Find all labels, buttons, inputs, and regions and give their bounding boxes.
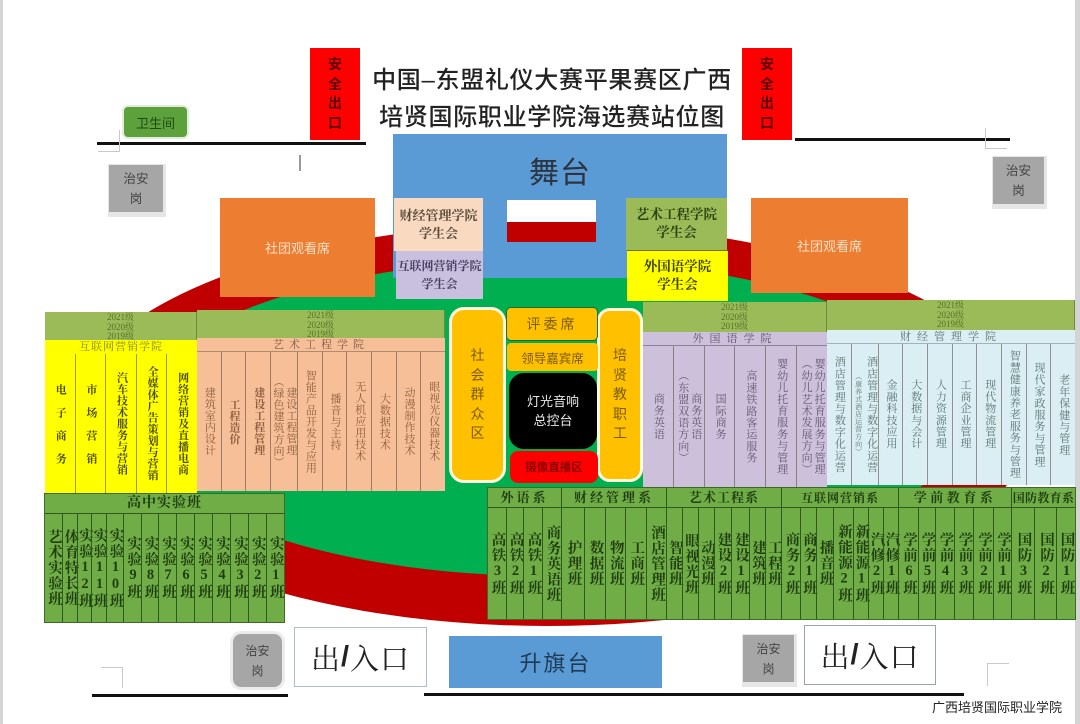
majors internet college: 市场营销 [85,384,97,476]
majors finance college: 人力资源管理 [934,379,946,450]
community audience area: 会 [470,367,484,383]
safety exit left [310,48,360,140]
finance management department: 护理班 [566,540,582,587]
year band art college: 2021级 [307,310,334,320]
safety exit right: 安 [760,56,774,72]
foreign language department: 高铁1班 [526,532,542,595]
preschool education department: 学前教育系 [914,490,996,505]
national defense education department: 国防1班 [1058,532,1074,595]
majors finance college: 酒店管理与数字化运营 [866,356,878,473]
majors finance college: 酒店管理与数字化运营 [833,356,845,473]
majors foreign language college [643,346,827,487]
leaders and guests seats: 领导嘉宾席 [521,352,584,366]
safety exit left: 口 [328,114,342,130]
majors art college: 播音与主持 [329,393,341,450]
security post top left: 岗 [130,192,142,206]
security post top right: 治安 [1006,164,1031,178]
year band foreign language college [643,302,827,332]
community audience area: 群 [470,386,484,402]
year band art college: 2020级 [307,320,334,330]
header foreign language college [643,332,827,346]
top left wall line [97,142,366,145]
class columns high school: 实验9班 [125,536,141,600]
internet marketing department: 汽修2班 [868,532,884,595]
community audience area: 区 [470,425,484,441]
year band foreign language college: 2021级 [721,302,748,312]
internet marketing department: 新能源1班 [854,524,870,603]
national defense education department: 国防3班 [1016,532,1032,595]
majors finance college: 大数据与会计 [910,379,922,450]
safety exit right [742,48,792,140]
club seating left: 社团观看席 [265,241,330,256]
year band finance college [827,300,1075,330]
majors foreign language college: （东盟双语方向） [677,370,689,463]
flag raising platform: 升旗台 [519,651,592,676]
camera and broadcast area [510,451,598,483]
class columns high school: 实验2班 [250,536,266,600]
preschool education department: 学前1班 [995,532,1011,595]
majors finance college: 工商企业管理 [959,379,971,450]
class columns high school: 实验5班 [196,536,212,600]
majors internet college: 全媒体广告策划与营销 [146,366,158,481]
staff area: 培 [613,347,627,363]
majors art college: 建设工程管理 [285,387,297,456]
finance management department: 物流班 [608,540,624,587]
class columns high school: 实验11班 [92,528,108,608]
security post bottom right: 治安 [756,642,780,656]
foreign language department: 外语系 [500,490,548,505]
safety exit left: 全 [328,76,342,92]
safety exit right: 口 [760,114,774,130]
heading high school classes: 高中实验班 [127,496,202,511]
class columns high school: 实验1班 [268,536,284,600]
majors art college: 建设工程管理 [253,387,265,456]
class columns high school: 实验6班 [178,536,194,600]
title [372,67,732,131]
entrance and exit right: / [850,638,860,670]
flag backdrop [507,200,596,242]
art engineering department: 艺术工程系 [689,490,759,505]
preschool education department [898,488,1011,619]
staff area [597,308,643,482]
student union art: 艺术工程学院 [636,207,717,222]
foreign language department: 高铁3班 [490,532,506,595]
majors internet college: 电子商务 [54,384,66,476]
majors finance college: 现代家政服务与管理 [1033,362,1045,467]
student union internet: 学生会 [421,277,458,291]
judges seats [506,307,598,341]
class columns high school: 艺术实验班 [46,529,62,607]
finance management department: 工商班 [628,540,644,587]
class columns high school: 体育特长班 [62,529,78,607]
majors internet college [45,354,197,493]
lighting and sound control [509,373,597,449]
community audience area [449,307,506,483]
student union foreign languages: 学生会 [657,277,698,292]
finance management department: 财经管理系 [574,490,654,505]
year band internet college [45,312,197,340]
majors internet college: 网络营销及直播电商 [177,372,189,475]
year band internet college: 2020级 [107,322,134,332]
student union internet: 互联网营销学院 [397,259,482,273]
security post bottom left: 岗 [251,664,264,678]
header finance college: 财经管理学院 [900,331,1002,343]
art engineering department [666,488,781,619]
class columns high school: 实验3班 [232,536,248,600]
year band art college: 2019级 [307,329,334,339]
finance management department: 酒店管理班 [649,525,665,602]
student union foreign languages [627,250,728,301]
majors art college: （绿色建筑方向） [272,376,284,468]
year band foreign language college: 2019级 [721,321,748,331]
majors finance college: 智慧健康养老服务与管理 [1008,350,1020,479]
student union art: 学生会 [656,225,697,240]
foreign language department: 高铁2班 [508,532,524,595]
class columns high school: 实验10班 [108,528,124,608]
preschool education department: 学前3班 [956,532,972,595]
entrance and exit left [294,627,427,687]
staff area: 贤 [613,367,627,383]
security post top left [108,164,166,217]
top right wall line [795,138,1010,141]
club seating left [220,198,375,297]
majors art college: 智能产品开发与应用 [304,370,316,473]
majors art college: 工程造价 [228,398,240,444]
year band foreign language college: 2020级 [721,312,748,322]
title: 中国–东盟礼仪大赛平果赛区广西 [372,67,732,94]
safety exit right: 出 [760,95,774,111]
header internet college [45,340,197,354]
art engineering department: 建设1班 [733,532,749,595]
security post bottom left [230,631,285,690]
foreign language department [488,490,561,619]
art engineering department: 智能班 [667,540,683,587]
entrance and exit right: 出 入口 [820,642,920,674]
class columns high school: 实验7班 [160,536,176,600]
year band internet college: 2021级 [107,312,134,322]
footer credit: 广西培贤国际职业学院 [932,700,1062,715]
art engineering department: 工程班 [766,540,782,587]
internet marketing department: 播音班 [818,540,834,587]
club seating right: 社团观看席 [797,239,862,254]
toilet sign [122,105,189,139]
club seating right [751,198,908,293]
title: 培贤国际职业学院海选赛站位图 [379,104,725,131]
lighting and sound control: 总控台 [533,413,572,428]
student union art [626,198,727,250]
majors foreign language college: 婴幼儿托育服务与管理 [813,358,825,475]
year band finance college: 2020级 [937,310,964,320]
community audience area: 社 [470,347,484,363]
toilet sign: 卫生间 [136,116,175,130]
class columns high school: 实验4班 [214,536,230,600]
majors foreign language college: 国际商务 [714,393,726,440]
community audience area: 众 [470,406,484,422]
internet marketing department: 商务1班 [801,532,817,595]
finance management department [561,488,666,619]
majors art college: 建筑室内设计 [203,387,215,456]
majors foreign language college: （幼儿艺术发展方向） [800,358,812,475]
student union finance: 学生会 [419,226,458,240]
internet marketing department: 新能源2班 [836,524,852,603]
security post bottom left: 治安 [245,644,270,658]
majors foreign language college: 商务英语 [652,393,664,440]
header art college: 艺术工程学院 [273,339,369,351]
majors art college [197,352,445,491]
year band internet college: 2019级 [107,331,134,341]
header finance college [827,330,1075,344]
majors internet college: 汽车技术服务与营销 [115,372,127,475]
internet marketing department: 互联网营销系 [801,491,879,505]
national defense education department: 国防教育系 [1013,491,1074,505]
internet marketing department [781,488,898,619]
internet marketing department: 汽修1班 [884,532,900,595]
majors finance college [827,344,1075,485]
art engineering department: 动漫班 [699,540,715,587]
high school experimental classes [44,493,285,623]
flag raising platform [449,636,662,688]
entrance and exit left: 出 入口 [311,644,410,676]
year band finance college: 2019级 [937,319,964,329]
finance management department: 数据班 [588,540,604,587]
preschool education department: 学前2班 [976,532,992,595]
preschool education department: 学前4班 [938,532,954,595]
majors foreign language college: 商务英语 [690,393,702,440]
art engineering department: 建筑班 [750,540,766,587]
header internet college: 互联网营销学院 [79,341,163,353]
majors finance college: （康养式酒店运营方向） [855,373,863,456]
national defense education department: 国防2班 [1038,532,1054,595]
lighting and sound control: 灯光音响 [527,394,579,409]
class columns high school [46,514,284,622]
majors art college: 动漫制作技术 [403,387,415,456]
camera and broadcast area: 摄像直播区 [525,462,583,474]
entrance and exit right [804,625,936,685]
majors finance college: 老年保健与管理 [1058,374,1070,455]
art engineering department: 眼视光班 [683,532,699,594]
security post bottom right [742,634,797,687]
internet marketing department: 商务2班 [784,532,800,595]
bottom right wall line [424,693,964,696]
majors art college: 大数据技术 [378,393,390,450]
majors art college: 无人机应用技术 [354,381,366,462]
security post bottom right: 岗 [762,662,774,676]
majors art college: 眼视光仪器技术 [428,381,440,462]
stage [393,134,727,278]
department classes table [487,487,1076,620]
foreign language department: 商务英语班 [544,525,560,602]
security post top right: 岗 [1012,184,1025,198]
security post top left: 治安 [123,172,148,186]
staff area: 工 [613,425,627,441]
security post top right [992,156,1047,209]
national defense education department [1011,488,1075,619]
safety exit left: 安 [328,56,342,72]
entrance and exit left: / [341,640,350,672]
stage: 舞台 [529,157,591,190]
staff area: 教 [613,386,627,402]
page edge strips [0,0,3,724]
student union internet [396,251,483,299]
header art college [197,338,445,352]
preschool education department: 学前6班 [901,532,917,595]
class columns high school: 实验12班 [77,528,93,608]
student union foreign languages: 外国语学院 [644,259,711,274]
student union finance [394,198,483,251]
judges seats: 评委席 [526,316,578,332]
art engineering department: 建设2班 [716,532,732,595]
majors finance college: 现代物流管理 [984,379,996,450]
year band art college [197,310,445,338]
student union finance: 财经管理学院 [399,208,478,222]
majors foreign language college: 高速铁路客运服务 [745,370,757,463]
heading high school classes [45,494,284,514]
majors foreign language college: 婴幼儿托育服务与管理 [776,358,788,475]
majors finance college: 金融科技应用 [885,379,897,450]
safety exit left: 出 [328,95,342,111]
header foreign language college: 外国语学院 [692,333,778,345]
staff area: 职 [613,406,627,422]
leaders and guests seats [507,343,598,371]
year band finance college: 2021级 [937,300,964,310]
preschool education department: 学前5班 [920,532,936,595]
bottom left wall line [92,694,288,697]
class columns high school: 实验8班 [142,536,158,600]
safety exit right: 全 [760,76,774,92]
